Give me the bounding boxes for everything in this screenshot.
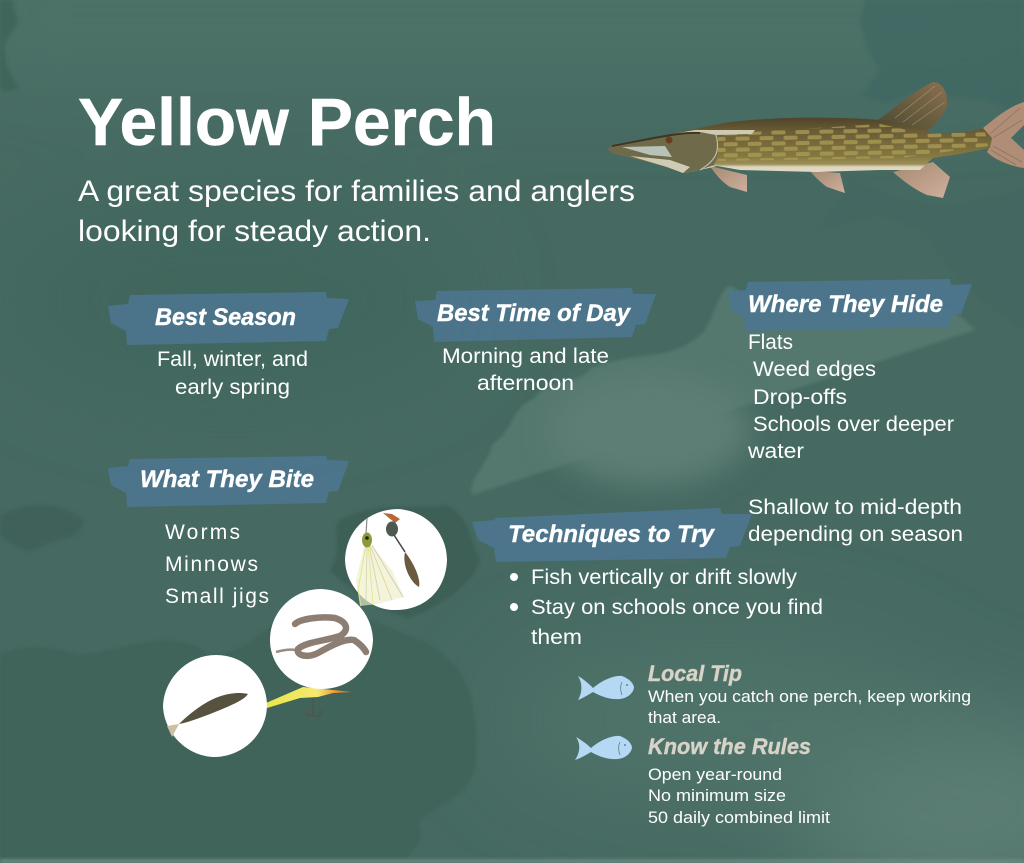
body text: Fall, winter, and (157, 348, 308, 371)
bullet list: Stay on schools once you find (531, 596, 823, 619)
bullet list: Fish vertically or drift slowly (531, 566, 798, 589)
tail fin (982, 102, 1024, 168)
body text: Weed edges (753, 358, 876, 381)
heading: Where They Hide (748, 291, 943, 318)
illustration: pike fish (608, 82, 1024, 198)
heading: What They Bite (140, 466, 314, 493)
body text: afternoon (477, 372, 574, 395)
tip text: When you catch one perch, keep working (648, 688, 971, 706)
head (608, 130, 755, 173)
bait list (165, 521, 269, 608)
panel: where they hide (728, 279, 972, 546)
panel: best time of day (415, 288, 656, 395)
body text (747, 331, 963, 546)
pectoral and ventral fins (710, 166, 747, 192)
subtitle: looking for steady action. (78, 215, 431, 248)
heading: Local Tip (648, 661, 742, 686)
body text (157, 348, 308, 399)
lure image (266, 687, 352, 716)
body text: water (747, 440, 804, 463)
body text: Drop-offs (753, 386, 847, 409)
banner (728, 279, 972, 331)
subtitle (78, 175, 635, 248)
panel: techniques to try (472, 508, 823, 649)
body text (442, 345, 609, 395)
panel: best season (108, 292, 349, 399)
title: Yellow Perch (78, 85, 496, 160)
icon: blue fish (575, 736, 632, 760)
minnow circle (163, 655, 267, 757)
panel: know the rules (575, 734, 830, 827)
body text: Morning and late (442, 345, 609, 368)
panel: local tip (578, 661, 971, 727)
rules text: No minimum size (648, 787, 786, 805)
banner (472, 508, 752, 562)
panel: what they bite (108, 456, 447, 757)
bullet list (510, 566, 823, 649)
subtitle: A great species for families and anglers (78, 175, 635, 208)
body text: depending on season (748, 523, 963, 546)
tip text: that area. (648, 709, 721, 727)
scale markings (718, 124, 988, 161)
bullet list: them (531, 626, 582, 649)
rules text (648, 766, 830, 827)
heading: Techniques to Try (508, 521, 716, 548)
body text: Schools over deeper (753, 413, 954, 436)
dorsal fin (878, 82, 947, 131)
body (608, 118, 992, 173)
bait list: Small jigs (165, 585, 269, 608)
body text: early spring (175, 376, 290, 399)
icon: blue fish (578, 676, 634, 700)
heading: Best Season (155, 304, 296, 331)
heading: Best Time of Day (437, 300, 632, 327)
banner (108, 456, 349, 507)
heading: Know the Rules (648, 734, 811, 759)
rules text: Open year-round (648, 766, 782, 784)
worm circle (270, 589, 373, 689)
spinnerbait circle (345, 509, 447, 610)
tip text (648, 688, 971, 727)
bait list: Minnows (165, 553, 258, 576)
banner (108, 292, 349, 345)
banner (415, 288, 656, 342)
body text: Shallow to mid-depth (748, 496, 962, 519)
rules text: 50 daily combined limit (648, 809, 830, 827)
bait list: Worms (165, 521, 240, 544)
body text: Flats (748, 331, 793, 354)
